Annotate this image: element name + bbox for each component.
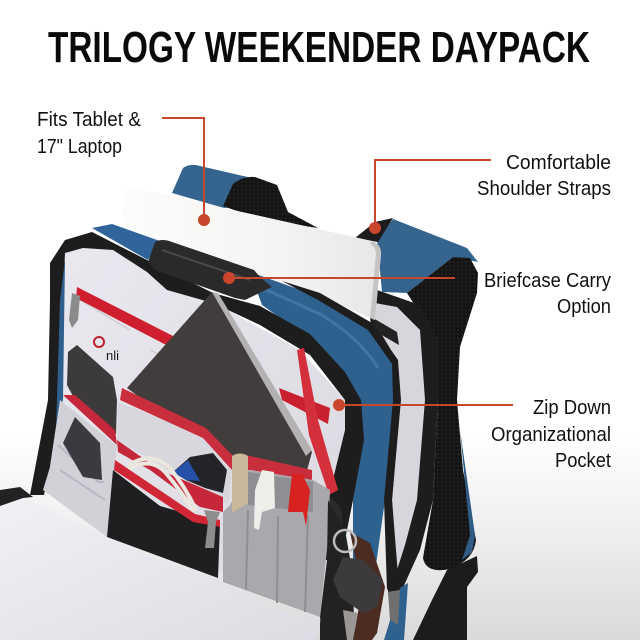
laptop [122, 187, 381, 320]
callout: comfortable shoulder straps: Comfortable [506, 152, 611, 174]
inner dark binding [30, 232, 364, 560]
middle grey pocket [117, 402, 232, 505]
pen pocket [223, 454, 330, 617]
keys [333, 530, 385, 640]
open flap lining [0, 487, 320, 640]
bottom zipper pull [388, 590, 400, 625]
back body zipper edge [370, 290, 438, 592]
callout: fits tablet and laptop [37, 109, 210, 226]
mesh pocket [107, 440, 223, 578]
zipper pocket with logo [69, 287, 173, 363]
callout: briefcase carry option: Option [557, 296, 611, 318]
carry handle [148, 240, 272, 300]
cable and adapter [173, 453, 227, 493]
organiser lining [43, 248, 347, 617]
dark corner under strap [320, 500, 355, 640]
backpack illustration [0, 165, 478, 640]
upper pocket red rims [63, 388, 312, 480]
lower left grey pocket [43, 400, 117, 537]
callout: fits tablet and laptop: 17" Laptop [37, 136, 122, 158]
right red zip and strap [279, 348, 342, 530]
shoulder strap mesh [407, 257, 478, 570]
callout: comfortable shoulder straps [369, 152, 611, 234]
zipper pocket with logo: nli [106, 348, 119, 363]
outer dark binding right [282, 281, 401, 590]
callout: zip down organizational pocket: Zip Down [533, 397, 611, 419]
callout: fits tablet and laptop: Fits Tablet & [37, 109, 142, 131]
power bank [63, 417, 102, 480]
callout: briefcase carry option [223, 270, 611, 318]
back panel top [355, 218, 478, 293]
callout: zip down organizational pocket: Pocket [555, 450, 611, 472]
front blue zip edges [92, 224, 408, 640]
lower strap webbing [413, 556, 478, 640]
callout: briefcase carry option: Briefcase Carry [484, 270, 611, 292]
tablet [127, 292, 312, 478]
callout: zip down organizational pocket: Organizational [491, 424, 611, 446]
top carry strap [172, 165, 318, 228]
callout: comfortable shoulder straps: Shoulder Straps [477, 178, 611, 200]
back body grey lining [373, 303, 425, 570]
callout: zip down organizational pocket [333, 397, 611, 472]
phone [67, 345, 117, 434]
